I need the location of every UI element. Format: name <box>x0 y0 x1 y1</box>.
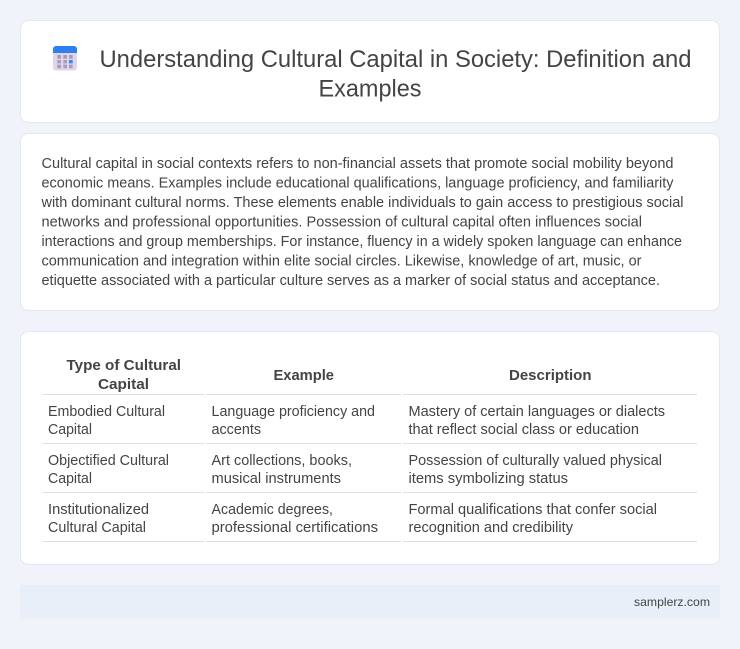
text block: intro paragraph: etiquette associated with a particular culture serves as a marker of social status and acceptance. <box>42 273 660 289</box>
table header row: Description <box>509 367 592 384</box>
text block: intro paragraph: with dominant cultural norms. These elements enable individuals to gain access to prestigious social <box>41 195 683 211</box>
footer <box>20 585 720 618</box>
panel: intro paragraph card <box>20 134 720 310</box>
text block: intro paragraph <box>41 156 683 289</box>
table header row: Example <box>274 367 334 384</box>
icon: calendar <box>53 46 77 70</box>
table header row: Type of Cultural <box>66 357 181 374</box>
table row: objectified: Possession of culturally valued physical <box>408 453 662 469</box>
footer source text: samplerz.com <box>634 595 710 609</box>
table row: embodied: Mastery of certain languages or dialects <box>408 404 665 420</box>
text block: intro paragraph: communication and integration within elite social circles. Likewise, knowledge of art, music, or <box>42 254 642 270</box>
table row: institutionalized: recognition and credibility <box>408 520 574 536</box>
table row: institutionalized: Formal qualifications that confer social <box>408 502 657 518</box>
table row: institutionalized: Institutionalized <box>48 502 149 518</box>
table row: embodied: Capital <box>48 422 92 438</box>
title <box>100 46 692 102</box>
table header row <box>66 357 592 393</box>
text block: intro paragraph: Cultural capital in social contexts refers to non-financial assets that promote social mobility beyond <box>42 156 674 172</box>
panel: table card <box>20 332 720 564</box>
table header row: Capital <box>98 376 149 393</box>
table row: embodied: that reflect social class or education <box>408 422 639 438</box>
table row: embodied: Language proficiency and <box>212 404 375 420</box>
panel: header card <box>20 20 720 122</box>
table row: embodied: accents <box>212 422 261 438</box>
table row: embodied: Embodied Cultural <box>48 404 165 420</box>
text block: intro paragraph: economic means. Examples include educational qualifications, language proficiency, and familiarity <box>42 176 674 192</box>
table row: objectified: musical instruments <box>212 471 341 487</box>
table row: institutionalized: Cultural Capital <box>48 520 146 536</box>
table row: objectified: items symbolizing status <box>408 471 568 487</box>
table row: institutionalized <box>48 502 657 536</box>
title: Understanding Cultural Capital in Society: Definition and <box>100 46 692 73</box>
text block: intro paragraph: networks and professional opportunities. Possession of cultural capital often influences social <box>42 214 642 230</box>
table row: objectified <box>48 453 662 487</box>
table row: institutionalized: professional certifications <box>212 520 378 536</box>
text block: intro paragraph: interactions and group memberships. For instance, fluency in a widely spoken language can enhance <box>42 234 682 250</box>
table row: embodied <box>48 404 665 438</box>
title: Examples <box>318 76 422 102</box>
table <box>43 357 697 542</box>
table row: objectified: Capital <box>48 471 92 487</box>
table row: objectified: Art collections, books, <box>212 453 352 469</box>
table row: objectified: Objectified Cultural <box>48 453 169 469</box>
table row: institutionalized: Academic degrees, <box>212 502 333 518</box>
